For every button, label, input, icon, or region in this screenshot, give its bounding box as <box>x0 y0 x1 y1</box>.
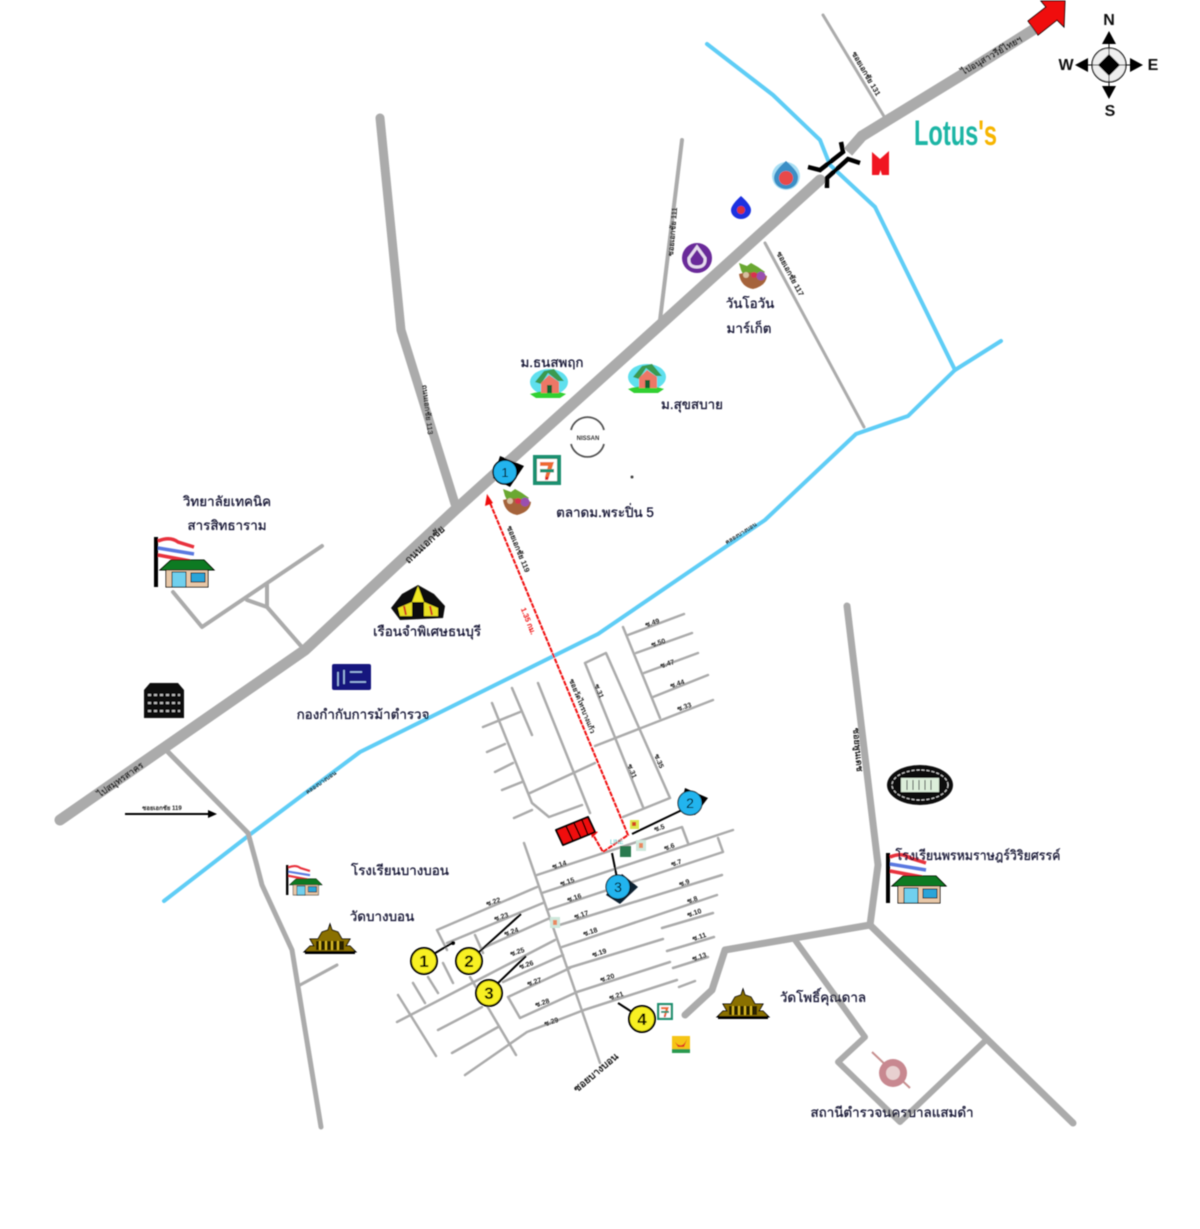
road labels: ถนนเอกชัย <box>402 523 447 566</box>
soi labels: ซ.31 <box>592 683 604 700</box>
icon: prison building <box>144 683 184 718</box>
red arrow destination <box>1028 1 1065 35</box>
marker: cyan 3: 3 <box>614 879 622 895</box>
road labels: ถนนเอกชัย 113 <box>420 384 435 435</box>
soi labels: ซ.47 <box>660 659 676 670</box>
soi labels: ซ.5 <box>653 824 666 834</box>
soi labels: ซ.24 <box>504 927 520 938</box>
soi labels: ซ.27 <box>527 977 543 988</box>
red building <box>556 817 595 845</box>
label: technical college: วิทยาลัยเทคนิค <box>182 494 271 509</box>
icon: market basket 2 <box>503 489 531 515</box>
soi labels: ซ.31 <box>625 763 637 780</box>
road labels: คลองบางบอน <box>724 521 759 546</box>
icon: fuel station small <box>731 196 751 219</box>
icon: car dealer logo: NISSAN <box>577 436 599 442</box>
label: technical college: สารสิทธาราม <box>187 518 267 533</box>
small shop icons: LINE <box>610 840 623 846</box>
soi labels: ซ.25 <box>510 947 526 958</box>
icon: temple lower left <box>304 924 356 954</box>
road labels: ซอยเอกชัย 119 <box>505 525 532 574</box>
label: village left: ม.ธนสพฤก <box>520 355 584 370</box>
label: right school: โรงเรียนพรหมราษฎร์วิริยศรรค์ <box>896 848 1060 863</box>
marker: cyan 3 <box>606 874 638 904</box>
Lotus's logo: Lotus's <box>914 114 997 153</box>
marker: yellow 3 <box>476 980 502 1006</box>
soi labels: ซ.6 <box>663 843 676 853</box>
soi labels: ซ.15 <box>560 877 576 888</box>
soi labels: ซ.18 <box>583 927 599 938</box>
road labels: ไปอนุสาวรีย์ไทยฯ <box>958 33 1024 78</box>
label: one-o-one market <box>726 296 774 336</box>
soi labels: ซ.44 <box>670 679 686 690</box>
soi labels: ซ.29 <box>544 1017 560 1028</box>
dot <box>630 476 634 478</box>
icon: house left <box>530 369 568 398</box>
road labels: ซอยเอกชัย 119 <box>142 804 182 812</box>
arrow heads <box>208 810 455 945</box>
label: market: ตลาดม.พระปิ่น 5 <box>556 503 654 520</box>
compass: N <box>1103 12 1115 29</box>
label: police station: สถานีตำรวจนครบาลแสมดำ <box>810 1105 974 1120</box>
road labels: ซอยเอกชัย 111 <box>666 207 679 257</box>
soi labels: ซ.49 <box>645 618 661 629</box>
marker: yellow 3: 3 <box>484 984 494 1003</box>
bridge <box>808 142 860 188</box>
marker: cyan 1: 1 <box>501 465 509 480</box>
marker: yellow 2: 2 <box>464 952 474 971</box>
secondary roads <box>168 15 1073 1127</box>
soi labels: ซ.8 <box>686 896 699 906</box>
route distance label: 1.35 กม. <box>519 606 538 636</box>
soi labels: ซ.16 <box>567 893 583 904</box>
marker: yellow 2 <box>456 948 482 974</box>
marker: yellow 1: 1 <box>419 952 429 971</box>
soi labels: ซ.50 <box>651 638 667 649</box>
small shop icons <box>550 820 646 928</box>
icon: seven eleven south <box>658 1004 672 1019</box>
label: temple right: วัดโพธิ์คุณดาล <box>780 987 866 1006</box>
label: police horse division: กองกำกับการม้าตำรวจ <box>297 707 429 722</box>
label: technical college <box>182 494 271 533</box>
icon: yellow shop logo <box>672 1036 690 1053</box>
icon: market basket <box>739 263 767 289</box>
icon: school right <box>886 853 946 903</box>
soi labels: ซ.14 <box>552 860 568 871</box>
road labels: ซอยพูนเดช <box>850 727 865 772</box>
road labels: ซอยเอกชัย 131 <box>850 50 882 98</box>
label: one-o-one market: มาร์เก็ต <box>727 319 771 336</box>
icon: car dealer logo <box>571 417 604 457</box>
icon: yellow prison <box>391 585 445 620</box>
label: village right: ม.สุขสบาย <box>661 397 723 413</box>
compass: E <box>1148 57 1159 74</box>
marker: cyan 2: 2 <box>686 795 694 811</box>
label: bang bon school: โรงเรียนบางบอน <box>351 863 449 878</box>
road labels: ซอยวัดไทรบางแก้ว <box>567 678 597 735</box>
label: bang bon temple: วัดบางบอน <box>350 909 414 924</box>
south soi grid <box>397 827 733 1075</box>
soi labels: ซ.33 <box>677 702 693 713</box>
icon: house right <box>628 364 666 393</box>
soi labels: ซ.28 <box>535 998 551 1009</box>
icon: school lower left <box>286 865 322 895</box>
soi labels: ซ.23 <box>494 912 510 923</box>
compass: S <box>1105 103 1116 120</box>
marker: cyan 1 <box>493 456 524 487</box>
label: one-o-one market: วันโอวัน <box>726 296 774 311</box>
label: prison: เรือนจำพิเศษธนบุรี <box>373 624 481 640</box>
compass <box>1058 12 1159 120</box>
middle soi grid <box>483 614 713 818</box>
soi labels <box>486 618 708 1028</box>
callouts <box>125 810 682 1012</box>
road labels <box>94 33 1024 1095</box>
soi labels: ซ.9 <box>678 879 691 889</box>
soi labels: ซ.11 <box>692 932 707 943</box>
soi labels: ซ.20 <box>600 973 616 984</box>
soi labels: ซ.21 <box>609 991 625 1002</box>
road labels: ไปสมุทรสาคร <box>94 759 146 800</box>
icon: police station <box>872 1052 910 1088</box>
icon: fuel station large <box>772 161 800 190</box>
marker: cyan 2 <box>678 788 708 815</box>
compass: W <box>1058 57 1074 74</box>
soi labels: ซ.26 <box>519 960 535 971</box>
road labels: คลองบางบอน <box>304 769 339 796</box>
soi labels: ซ.35 <box>652 753 664 770</box>
soi labels: ซ.17 <box>574 910 590 921</box>
marker: yellow 4: 4 <box>637 1010 647 1029</box>
icon: blue sign <box>332 664 371 690</box>
soi labels: ซ.13 <box>692 952 708 963</box>
soi labels: ซ.19 <box>592 948 608 959</box>
road labels: ซอยเอกชัย 117 <box>775 250 806 298</box>
icon: purple bank <box>682 243 712 273</box>
road labels: ซอยบางบอน <box>572 1051 621 1095</box>
icon: stadium <box>887 765 953 805</box>
icon: school left <box>154 537 214 587</box>
river network <box>164 44 1001 901</box>
red route <box>485 494 628 852</box>
soi labels: ซ.22 <box>486 897 502 908</box>
icon: red M logo <box>872 151 889 175</box>
soi labels: ซ.10 <box>687 908 703 919</box>
icon: temple right <box>717 989 769 1019</box>
marker: yellow 1 <box>411 948 437 974</box>
marker: yellow 4 <box>629 1006 655 1032</box>
soi labels: ซ.7 <box>670 859 683 869</box>
main highway <box>60 28 1036 820</box>
icon: seven eleven <box>535 457 559 483</box>
